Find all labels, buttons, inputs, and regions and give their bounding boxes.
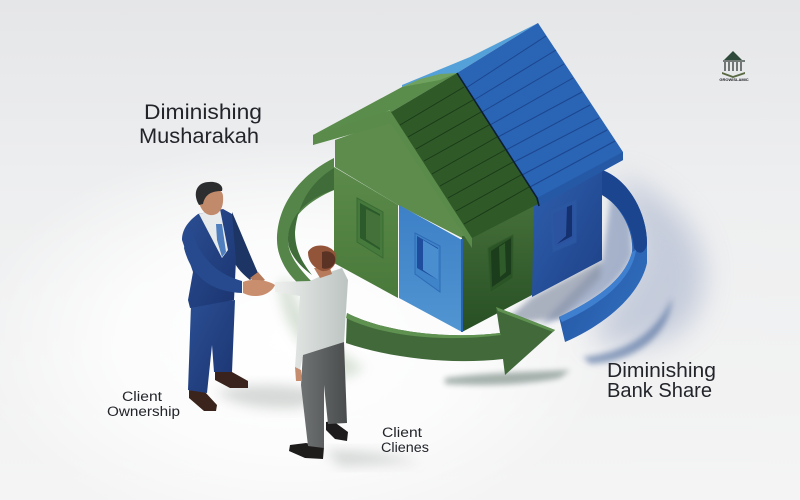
jacket <box>182 209 236 308</box>
man in white shirt <box>275 245 348 459</box>
roof: gable barge board <box>313 110 472 248</box>
label: Client Ownership: Client <box>122 389 162 404</box>
roof: blue planks <box>457 23 623 206</box>
hand <box>295 367 302 381</box>
hair <box>196 182 222 205</box>
house <box>313 23 623 332</box>
label: Client Ownership: Ownership <box>107 404 180 419</box>
man in suit <box>182 182 275 411</box>
shirt <box>275 268 348 370</box>
wall: blue right <box>532 165 602 297</box>
gable front <box>335 120 472 248</box>
window: green left wall <box>357 198 383 258</box>
cast shadows <box>215 175 704 466</box>
shoes <box>326 421 348 441</box>
window: blue panel <box>415 233 440 292</box>
neck <box>314 268 332 278</box>
green arrow <box>346 307 555 375</box>
blue ring segment <box>559 170 647 342</box>
window: blue wall <box>550 200 576 252</box>
clasped hands <box>243 280 275 296</box>
far arm <box>232 212 258 280</box>
logo: GrowIslamic: GROWISLAMIC <box>719 77 749 82</box>
wall: green left <box>334 167 398 298</box>
head <box>198 188 223 215</box>
wall: dark green right <box>462 200 534 332</box>
title: Diminishing Musharakah: Musharakah <box>139 124 259 148</box>
head and hair <box>308 245 336 271</box>
label: Client Clienes: Clienes <box>381 440 429 455</box>
roof: light green ridge and eave <box>313 73 457 145</box>
title: Diminishing Musharakah: Diminishing <box>144 100 262 124</box>
window: dark green wall <box>488 235 513 293</box>
shoes <box>215 372 248 388</box>
roof: back light blue strip <box>402 23 538 87</box>
far hand <box>250 272 265 284</box>
logo: GrowIslamic <box>719 51 749 82</box>
label: Diminishing Bank Share: Bank Share <box>607 380 712 402</box>
trousers <box>188 300 235 393</box>
panel: light blue front <box>399 205 462 332</box>
roof: dark green planks <box>391 73 538 238</box>
label: Diminishing Bank Share: Diminishing <box>607 360 716 382</box>
label: Client Clienes: Client <box>382 425 422 440</box>
near arm <box>184 222 242 293</box>
trousers <box>301 342 347 448</box>
green ring back segment <box>277 158 334 288</box>
shirt and tie <box>199 209 228 258</box>
